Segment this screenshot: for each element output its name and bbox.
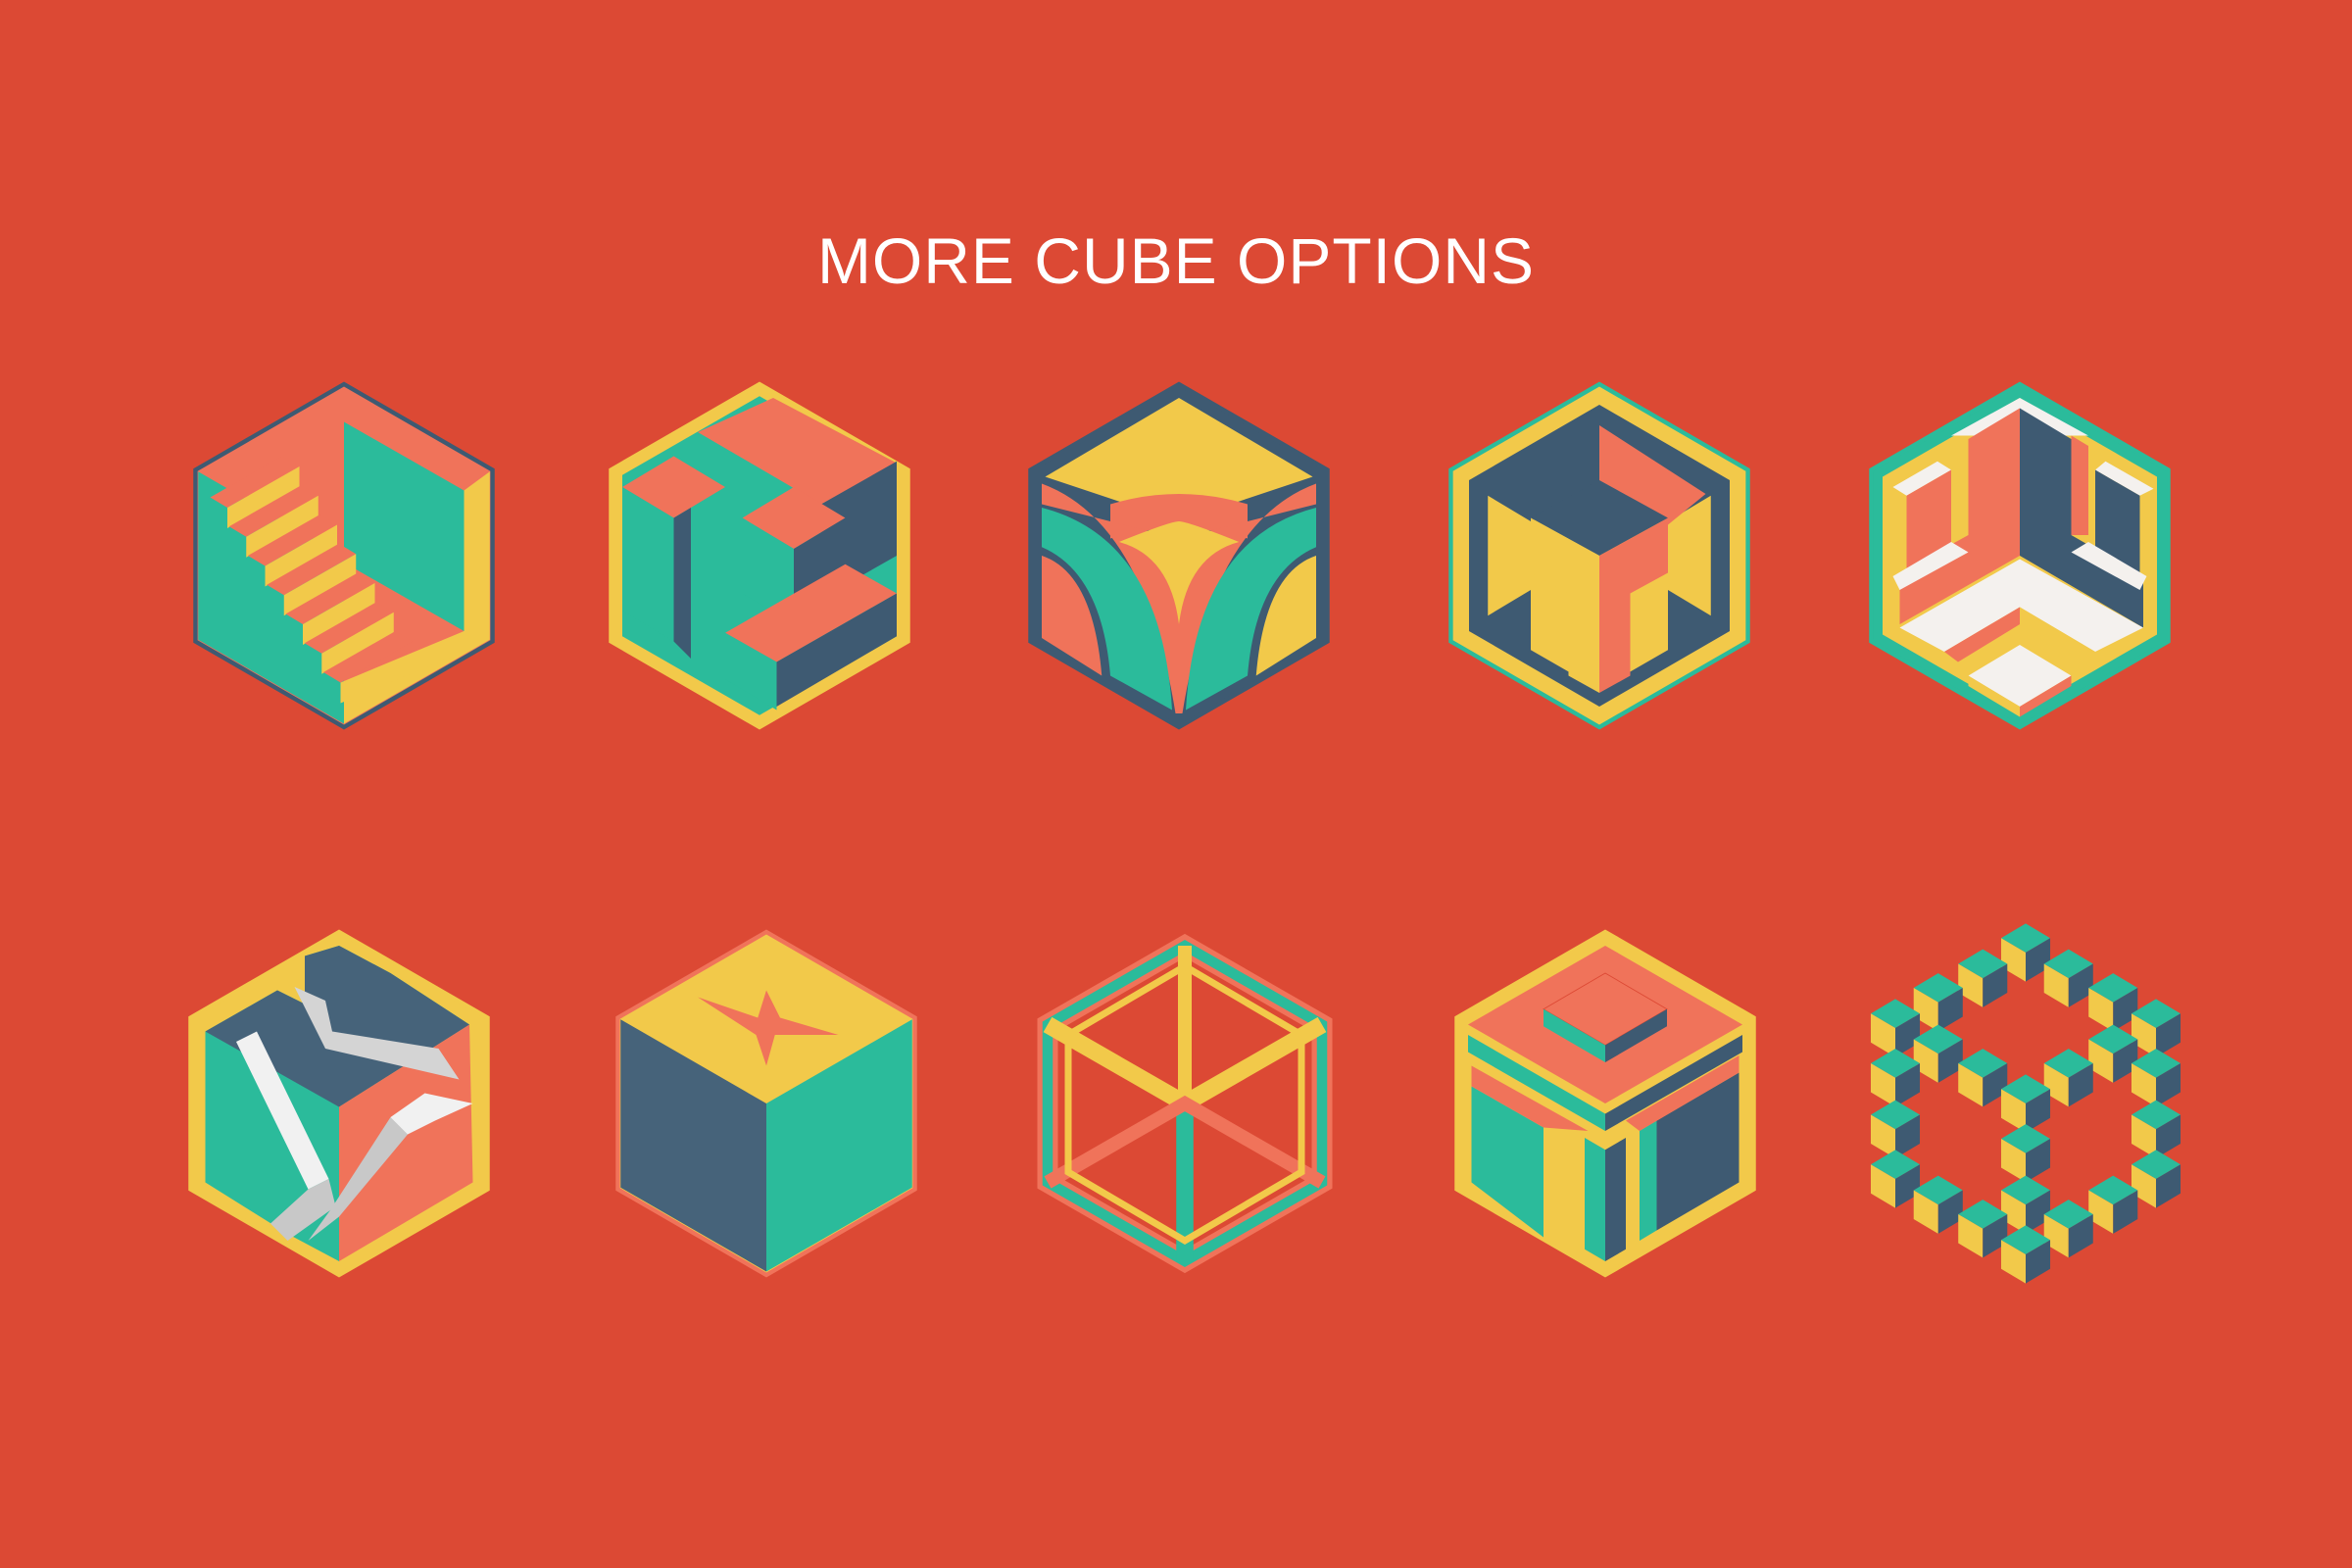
title: MORE CUBE OPTIONS <box>817 224 1535 297</box>
icon: stairs cube <box>195 384 493 727</box>
icon: wireframe cube <box>1048 946 1322 1261</box>
icon: small cubes ring <box>1871 923 2180 1284</box>
icon: plain cube <box>617 932 915 1275</box>
icon: T block cube <box>1456 932 1754 1275</box>
icon: curved cube <box>1030 384 1328 727</box>
icon: abstract cube <box>190 932 488 1275</box>
icon: blocks cube <box>611 384 908 727</box>
icon: T cube <box>1450 384 1748 727</box>
icon: corner room cube <box>1871 384 2169 727</box>
